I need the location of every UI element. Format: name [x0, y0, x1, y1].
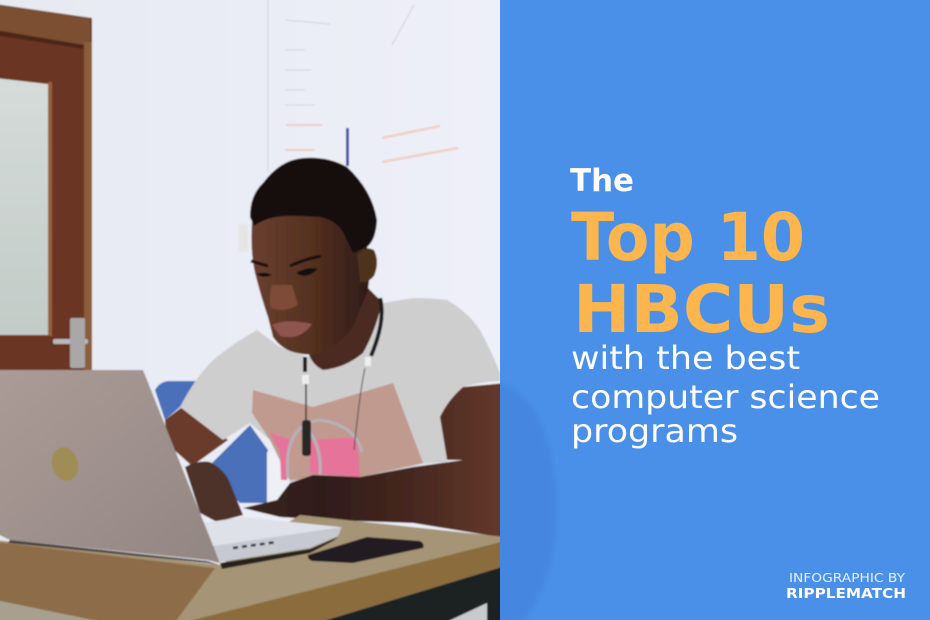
credit: INFOGRAPHIC BY [789, 571, 906, 585]
hair [250, 158, 377, 253]
title: Top 10 [571, 199, 805, 276]
laptop [0, 370, 342, 569]
title: with the best [571, 339, 800, 377]
eyebrows [251, 256, 321, 266]
shirt pink letters [270, 433, 360, 480]
door [0, 4, 92, 372]
neck [308, 280, 382, 370]
whiteboard [238, 0, 458, 252]
face [251, 205, 372, 354]
earphone cable [302, 298, 382, 456]
credit: RIPPLEMATCH [786, 586, 906, 602]
panel: photo of student at laptop [0, 0, 510, 620]
eyes [256, 268, 318, 277]
shirt arc logo [287, 420, 362, 478]
left arm [165, 407, 228, 466]
title: HBCUs [573, 271, 830, 348]
chair and arm reflection [500, 388, 554, 620]
blue chair [155, 381, 285, 503]
title: The [570, 163, 634, 199]
title: computer science [571, 378, 880, 416]
typing hand [185, 462, 243, 522]
t-shirt [180, 298, 500, 482]
ear [357, 248, 377, 282]
title: programs [571, 412, 738, 450]
title [570, 163, 880, 450]
desk [0, 515, 505, 620]
phone [308, 537, 424, 563]
right arm [243, 383, 505, 538]
nose highlight [270, 285, 298, 310]
credit [786, 571, 906, 602]
wall background [0, 0, 510, 620]
panel: blue title panel [500, 168, 905, 620]
mouth [272, 321, 312, 337]
shirt print [252, 383, 423, 480]
student [165, 158, 505, 538]
